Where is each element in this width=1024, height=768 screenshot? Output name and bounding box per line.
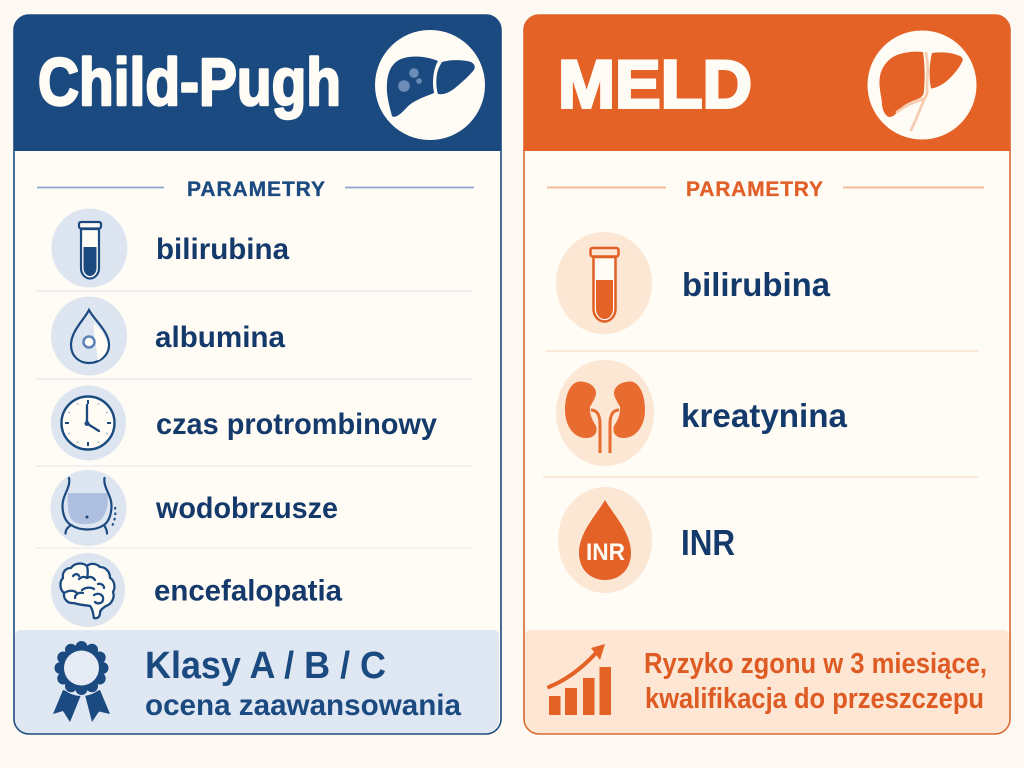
row: czas protrombinowy <box>51 386 437 460</box>
title: Child-Pugh: Child-Pugh <box>38 45 341 120</box>
icon: blood drop INR: INR <box>586 539 625 566</box>
row: kreatynina <box>556 360 848 466</box>
row: wodobrzusze: wodobrzusze <box>155 492 338 525</box>
header: Child-Pugh <box>14 15 502 151</box>
panel: Child-Pugh <box>14 15 502 734</box>
row: bilirubina <box>52 208 289 288</box>
row: czas protrombinowy: czas protrombinowy <box>156 408 437 441</box>
text: kwalifikacja: kwalifikacja do przeszczepu <box>645 683 984 715</box>
text: ocena zaawansowania: ocena zaawansowania <box>145 689 461 722</box>
icon: brain <box>51 553 125 627</box>
row: wodobrzusze <box>50 470 338 546</box>
icon: diseased liver <box>375 30 485 140</box>
row: encefalopatia: encefalopatia <box>154 574 342 608</box>
heading: parametry: PARAMETRY <box>187 178 325 201</box>
row: bilirubina: bilirubina <box>682 266 831 303</box>
row: kreatynina: kreatynina <box>681 397 848 434</box>
panel: MELD <box>524 15 1010 734</box>
text: ryzyko zgonu: Ryzyko zgonu w 3 miesiące, <box>644 648 987 680</box>
header: MELD <box>524 15 1010 151</box>
icon: test tube <box>52 208 128 288</box>
icon: kidneys <box>556 360 654 466</box>
icon: drop <box>51 296 127 376</box>
icon: rosette <box>53 640 110 722</box>
heading: parametry: PARAMETRY <box>686 178 823 201</box>
row: albumina <box>51 296 285 376</box>
text: klasy A / B / C: Klasy A / B / C <box>145 645 386 687</box>
footer: ryzyko <box>525 630 1009 733</box>
icon: clock <box>51 386 126 460</box>
row: encefalopatia <box>51 553 342 627</box>
row: INR <box>558 487 735 593</box>
footer: klasy <box>15 630 499 733</box>
row: bilirubina: bilirubina <box>156 233 289 266</box>
icon: abdomen with ascites <box>50 470 126 546</box>
row: INR: INR <box>681 522 735 563</box>
icon: rising chart <box>549 644 611 715</box>
title: MELD: MELD <box>558 46 752 122</box>
icon: blood drop INR <box>558 487 652 593</box>
row: bilirubina <box>556 232 831 334</box>
icon: liver <box>868 30 976 140</box>
icon: test tube <box>556 232 652 334</box>
row: albumina: albumina <box>155 321 285 354</box>
